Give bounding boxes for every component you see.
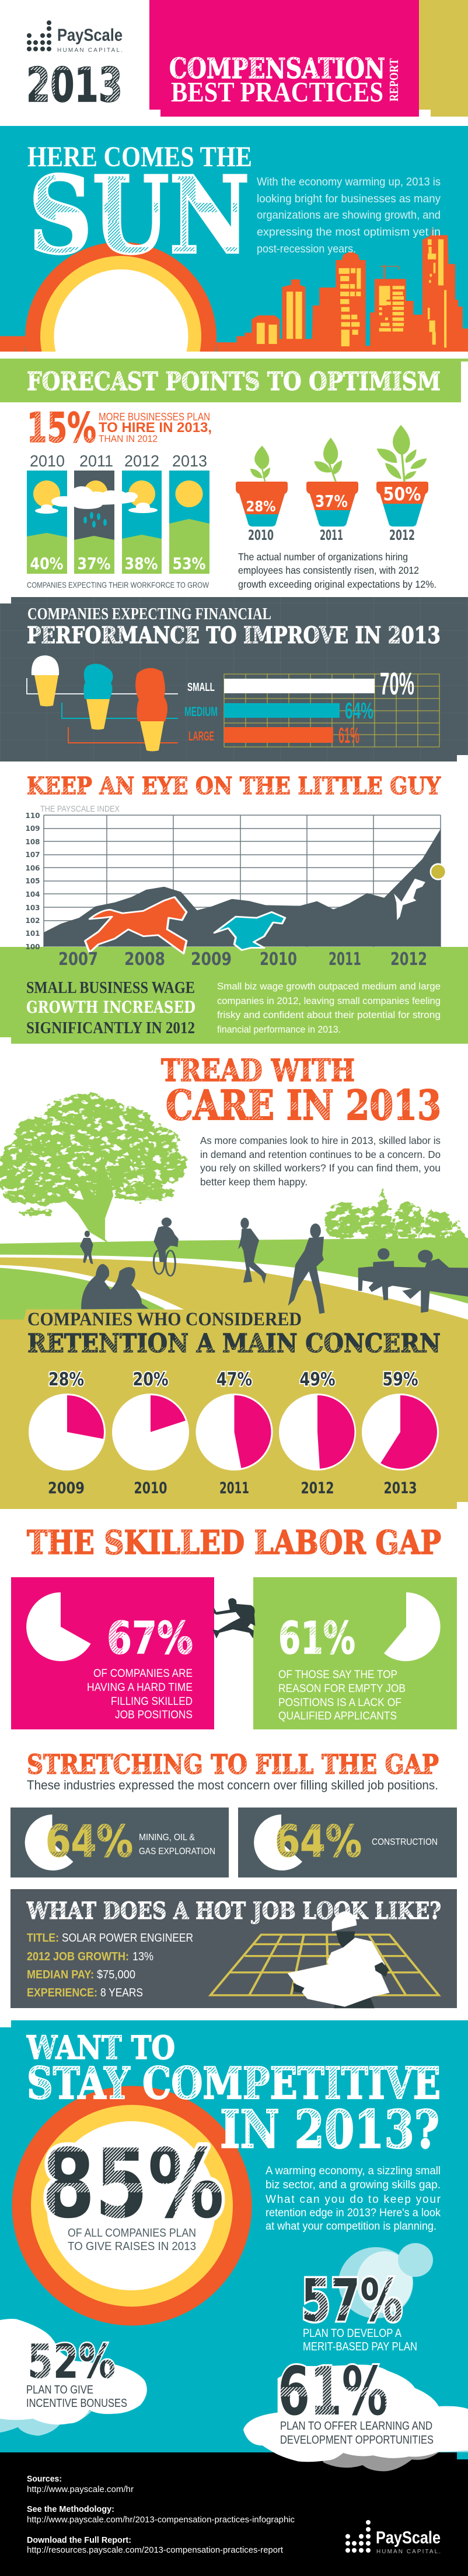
report title: COMPENSATION xyxy=(169,52,385,85)
y axis labels: 104 xyxy=(25,890,40,899)
bar: large xyxy=(188,724,359,748)
stat: 64%: 64% xyxy=(275,1816,362,1867)
competitive text: at what your competition is planning. xyxy=(266,2220,436,2233)
icon: teal dog xyxy=(214,912,285,950)
intro text: post-recession years. xyxy=(257,243,356,255)
x axis years: 2007 xyxy=(58,949,98,970)
year labels: 2010 xyxy=(30,452,65,470)
y axis labels: 103 xyxy=(25,904,40,912)
pink title panel xyxy=(149,0,468,117)
heading: companies who considered: COMPANIES WHO CONSIDERED xyxy=(27,1309,302,1330)
icon: jumping person xyxy=(212,1598,255,1638)
stat description: 52% xyxy=(26,2384,127,2410)
chart: the payscale index xyxy=(25,804,446,970)
stat description: REASON FOR EMPTY JOB xyxy=(278,1683,406,1695)
stat description: 52%: INCENTIVE BONUSES xyxy=(26,2397,127,2410)
bar: large: LARGE xyxy=(188,729,214,743)
panel: stay competitive xyxy=(0,2020,468,2452)
job details: SOLAR POWER ENGINEER xyxy=(62,1932,193,1945)
competitive text: retention edge in 2013? Here's a look xyxy=(266,2207,441,2219)
stat description: POSITIONS IS A LACK OF xyxy=(278,1697,401,1709)
stat description: 61%: DEVELOPMENT OPPORTUNITIES xyxy=(280,2434,434,2447)
bar chart: financial outlook by company size: 61% xyxy=(338,724,359,748)
pie: 67% xyxy=(26,1592,91,1661)
pot 2012 xyxy=(376,482,428,540)
callout: 15% more businesses: 15% xyxy=(27,404,96,452)
stat: 85%: 85% xyxy=(42,2129,224,2240)
panel: forecast heading bar xyxy=(0,359,468,402)
competitive text: A warming economy, a sizzling small xyxy=(266,2165,441,2177)
hiring text xyxy=(238,551,436,590)
icon: background trees xyxy=(325,1188,468,1241)
chart: plant pots xyxy=(233,425,436,590)
axis lines xyxy=(27,678,178,743)
pot 2011: 37% xyxy=(315,492,348,511)
year labels: 2011 xyxy=(79,452,113,470)
pie chart: 2010: 2010 xyxy=(134,1479,167,1497)
sun illustration xyxy=(25,242,216,352)
x axis years xyxy=(58,949,427,970)
stat description xyxy=(87,1668,193,1721)
panel: retention xyxy=(0,1309,468,1509)
heading: here comes the: HERE COMES THE xyxy=(27,140,252,173)
stat description: 57%: PLAN TO DEVELOP A xyxy=(303,2327,402,2340)
y axis labels: 109 xyxy=(25,824,40,833)
job details: 8 YEARS xyxy=(100,1987,143,1999)
report title: REPORT xyxy=(387,58,401,101)
heading: small business wage growth: GROWTH INCREASED xyxy=(26,998,195,1017)
heading: want to: WANT TO xyxy=(26,2028,175,2066)
logo: PayScale: HUMAN CAPITAL. xyxy=(57,47,123,54)
bar: medium xyxy=(184,699,373,724)
callout: 15% more businesses: THAN IN 2012 xyxy=(99,433,158,444)
job details xyxy=(27,1932,193,1999)
stat description xyxy=(278,1669,406,1722)
heading: companies expecting financial: COMPANIES EXPECTING FINANCIAL xyxy=(27,605,271,623)
sun illustration xyxy=(12,2086,252,2325)
wage text: financial performance in 2013. xyxy=(217,1024,341,1035)
panel: construction stat xyxy=(238,1808,457,1877)
y axis labels: 106 xyxy=(25,864,40,872)
bar: small: 70% xyxy=(380,666,414,701)
heading: small business wage growth: SMALL BUSINESS WAGE xyxy=(26,978,195,997)
intro text: With the economy warming up, 2013 is xyxy=(257,176,441,188)
sources: Download the Full Report: xyxy=(27,2535,131,2545)
logo: PayScale white: HUMAN CAPITAL. xyxy=(376,2549,441,2555)
icon: bubbles xyxy=(338,2243,433,2318)
illustration: park scene xyxy=(0,1094,468,1329)
bar chart: financial outlook by company size xyxy=(184,666,439,748)
sources: http://resources.payscale.com/2013-compensation-practices-report xyxy=(27,2545,284,2555)
column 2011: 37% xyxy=(77,554,111,573)
pie chart: 2011: 47% xyxy=(216,1369,252,1390)
report title xyxy=(169,52,401,108)
icon: left cloud xyxy=(0,2319,147,2436)
sources: http://www.payscale.com/hr xyxy=(27,2484,134,2494)
tread text: As more companies look to hire in 2013, skilled labor is xyxy=(200,1135,441,1146)
icon: clouds xyxy=(35,486,158,514)
panel: financial performance xyxy=(0,597,468,761)
icon: people silhouettes xyxy=(80,1217,468,1314)
stat: 64%: 64% xyxy=(46,1816,133,1867)
pie chart: 2011 xyxy=(196,1369,273,1497)
y axis labels: 100 xyxy=(25,943,40,951)
y axis labels: 107 xyxy=(25,851,40,859)
pie chart: 2009 xyxy=(29,1369,106,1497)
icon: solar panel xyxy=(211,1935,439,1995)
wage text xyxy=(217,981,441,1035)
year labels xyxy=(30,452,207,470)
grid xyxy=(44,815,441,947)
column 2010: 40% xyxy=(30,554,63,573)
label: mining: GAS EXPLORATION xyxy=(139,1847,215,1856)
pie chart: 2012: 2012 xyxy=(301,1479,334,1497)
stat description: 61% xyxy=(280,2420,434,2447)
column 2012: 38% xyxy=(125,554,158,573)
stat: 61%: 61% xyxy=(278,2353,388,2430)
heading: small business wage growth xyxy=(26,978,195,1037)
pot 2011 xyxy=(306,482,358,540)
column 2012 xyxy=(122,471,162,574)
y axis labels xyxy=(25,812,40,951)
bar: medium: 64% xyxy=(345,699,373,724)
stat description: 52%: PLAN TO GIVE xyxy=(26,2384,93,2396)
wage text: frisky and confident about their potential for strong xyxy=(217,1010,441,1020)
pie chart: 2010 xyxy=(112,1369,189,1497)
intro text: expressing the most optimism yet in xyxy=(257,226,441,238)
intro text xyxy=(257,176,441,255)
y axis labels: 102 xyxy=(25,917,40,925)
chart title: THE PAYSCALE INDEX xyxy=(40,804,120,814)
tread text: better keep them happy. xyxy=(200,1176,308,1188)
stat description: 61%: PLAN TO OFFER LEARNING AND xyxy=(280,2420,432,2433)
bar: small xyxy=(187,666,414,701)
pot 2012: 2012 xyxy=(389,527,415,543)
intro text: organizations are showing growth, and xyxy=(257,209,441,222)
x axis years: 2010 xyxy=(260,949,297,970)
stat description: OF ALL COMPANIES PLAN xyxy=(68,2226,196,2240)
stat description: JOB POSITIONS xyxy=(115,1709,193,1721)
x axis years: 2008 xyxy=(124,949,165,970)
intro text: looking bright for businesses as many xyxy=(257,192,441,205)
competitive text: biz sector, and a growing skills gap. xyxy=(266,2179,441,2191)
column 2010 xyxy=(27,471,67,574)
y axis labels: 101 xyxy=(25,929,40,938)
panel: footer xyxy=(0,2452,468,2576)
stat description: TO GIVE RAISES IN 2013 xyxy=(68,2240,196,2253)
heading: tread with care in 2013: TREAD WITH xyxy=(161,1053,355,1089)
icon: engineer with blueprint xyxy=(288,1911,390,2008)
hiring text: The actual number of organizations hiring xyxy=(238,551,408,563)
logo: PayScale white xyxy=(345,2520,441,2555)
icon: orange dog xyxy=(85,897,187,953)
label: construction: CONSTRUCTION xyxy=(372,1837,438,1847)
stat description xyxy=(68,2226,196,2253)
pie: mining xyxy=(25,1815,73,1870)
pie: 61% xyxy=(384,1592,441,1661)
pot 2010 xyxy=(236,482,288,540)
ground and paths xyxy=(0,1238,468,1329)
x axis years: 2012 xyxy=(390,949,427,970)
stat: 67%: 67% xyxy=(107,1613,193,1665)
callout: 15% more businesses: TO HIRE IN 2013, xyxy=(99,420,212,436)
pie chart: 2009: 28% xyxy=(48,1369,84,1390)
pie chart: 2012 xyxy=(279,1369,356,1497)
panel: hot job xyxy=(11,1889,457,2008)
icon: plants xyxy=(250,425,427,482)
tread text: in demand and retention continues to be a concern. Do xyxy=(200,1149,441,1160)
competitive text xyxy=(266,2165,441,2233)
competitive text: What can you do to keep your xyxy=(266,2194,441,2206)
subheading text: These industries expressed the most concern over filling skilled job positions. xyxy=(27,1778,438,1792)
sources: http://www.payscale.com/hr/2013-compensation-practices-infographic xyxy=(27,2515,295,2525)
label: mining: MINING, OIL & xyxy=(139,1833,195,1842)
stat: 61%: 61% xyxy=(278,1613,355,1665)
icon: medium ice cream xyxy=(83,664,113,730)
wage text: Small biz wage growth outpaced medium and large xyxy=(217,981,441,992)
pot 2010: 28% xyxy=(246,498,275,515)
label: mining xyxy=(139,1833,215,1856)
job details: MEDIAN PAY: xyxy=(27,1968,94,1981)
pot 2012: 50% xyxy=(383,484,421,505)
logo: PayScale xyxy=(27,20,123,54)
icon: tennis ball xyxy=(430,863,446,880)
pie chart: 2009: 2009 xyxy=(48,1479,85,1497)
pie: construction xyxy=(254,1815,302,1870)
column 2013 xyxy=(169,471,209,574)
skyline illustration xyxy=(0,226,468,352)
job details: TITLE: xyxy=(27,1932,59,1945)
icon: small ice cream xyxy=(32,655,59,707)
stat description: OF COMPANIES ARE xyxy=(93,1668,193,1680)
icon: large ice cream xyxy=(135,668,167,751)
pie chart: 2013 xyxy=(362,1369,439,1497)
icon: right cloud xyxy=(243,2365,468,2471)
panel: 61% of those xyxy=(253,1577,457,1729)
y axis labels: 108 xyxy=(25,838,40,846)
callout: 15% more businesses: MORE BUSINESSES PLAN xyxy=(99,411,210,423)
wage text: companies in 2012, leaving small companies feeling xyxy=(217,996,441,1006)
hiring text: growth exceeding original expectations by 12%. xyxy=(238,578,436,590)
logo: PayScale white: PayScale xyxy=(376,2528,441,2547)
year labels: 2013 xyxy=(172,452,207,470)
pie chart: 2011: 2011 xyxy=(219,1479,249,1497)
job details: 13% xyxy=(132,1950,153,1963)
heading: sun: SUN xyxy=(29,153,250,278)
stat description: 57% xyxy=(303,2327,417,2353)
job details: 2012 JOB GROWTH: xyxy=(27,1950,129,1963)
panel: here comes the sun xyxy=(0,126,468,352)
stat: 52%: 52% xyxy=(27,2335,116,2389)
x axis years: 2009 xyxy=(191,949,232,970)
sources: Sources: xyxy=(27,2474,62,2484)
stat description: 57%: MERIT-BASED PAY PLAN xyxy=(303,2340,417,2353)
stat description: FILLING SKILLED xyxy=(111,1696,193,1708)
year labels: 2012 xyxy=(124,452,159,470)
tread text: you rely on skilled workers? If you can find them, you xyxy=(200,1162,441,1174)
icon: white dog xyxy=(394,879,425,920)
hiring text: employees has consistently risen, with 2012 xyxy=(238,564,419,576)
x axis years: 2011 xyxy=(329,949,361,970)
sources: See the Methodology: xyxy=(27,2504,114,2514)
job details: EXPERIENCE: xyxy=(27,1987,97,1999)
panel: 67% of companies xyxy=(11,1577,214,1729)
chart: workforce growth weather columns xyxy=(27,452,209,589)
area series and dogs xyxy=(44,829,446,953)
y axis labels: 105 xyxy=(25,877,40,885)
report title: BEST PRACTICES xyxy=(171,76,383,108)
logo: PayScale: PayScale xyxy=(57,26,123,45)
panel: wage growth strip xyxy=(0,947,468,1044)
pot 2010: 2010 xyxy=(248,527,274,543)
year 2013: 2013 xyxy=(26,58,123,113)
pot 2011: 2011 xyxy=(320,527,343,543)
y axis labels: 110 xyxy=(25,812,40,820)
tread text xyxy=(200,1135,441,1188)
panel: mining stat xyxy=(11,1808,229,1877)
pie chart: 2013: 2013 xyxy=(384,1479,417,1497)
job details: $75,000 xyxy=(97,1968,135,1981)
column 2013: 53% xyxy=(173,554,205,573)
heading: tread with care in 2013 xyxy=(161,1053,441,1129)
bar: medium: MEDIUM xyxy=(184,704,218,719)
header panel xyxy=(26,0,468,117)
callout: 15% more businesses xyxy=(27,404,212,452)
pie chart: 2013: 59% xyxy=(383,1369,418,1390)
icon: tree xyxy=(0,1094,187,1244)
bar: small: SMALL xyxy=(187,681,215,694)
stat description: OF THOSE SAY THE TOP xyxy=(278,1669,397,1681)
sources xyxy=(27,2474,295,2555)
pie chart: 2010: 20% xyxy=(133,1369,168,1390)
stat description: QUALIFIED APPLICANTS xyxy=(278,1710,397,1722)
pie chart: 2012: 49% xyxy=(300,1369,335,1390)
stat: 57%: 57% xyxy=(301,2266,403,2335)
caption: COMPANIES EXPECTING THEIR WORKFORCE TO GROW xyxy=(27,580,209,589)
heading: small business wage growth: SIGNIFICANTLY IN 2012 xyxy=(26,1019,195,1037)
stat description: HAVING A HARD TIME xyxy=(87,1682,193,1694)
column 2011 xyxy=(74,471,114,574)
